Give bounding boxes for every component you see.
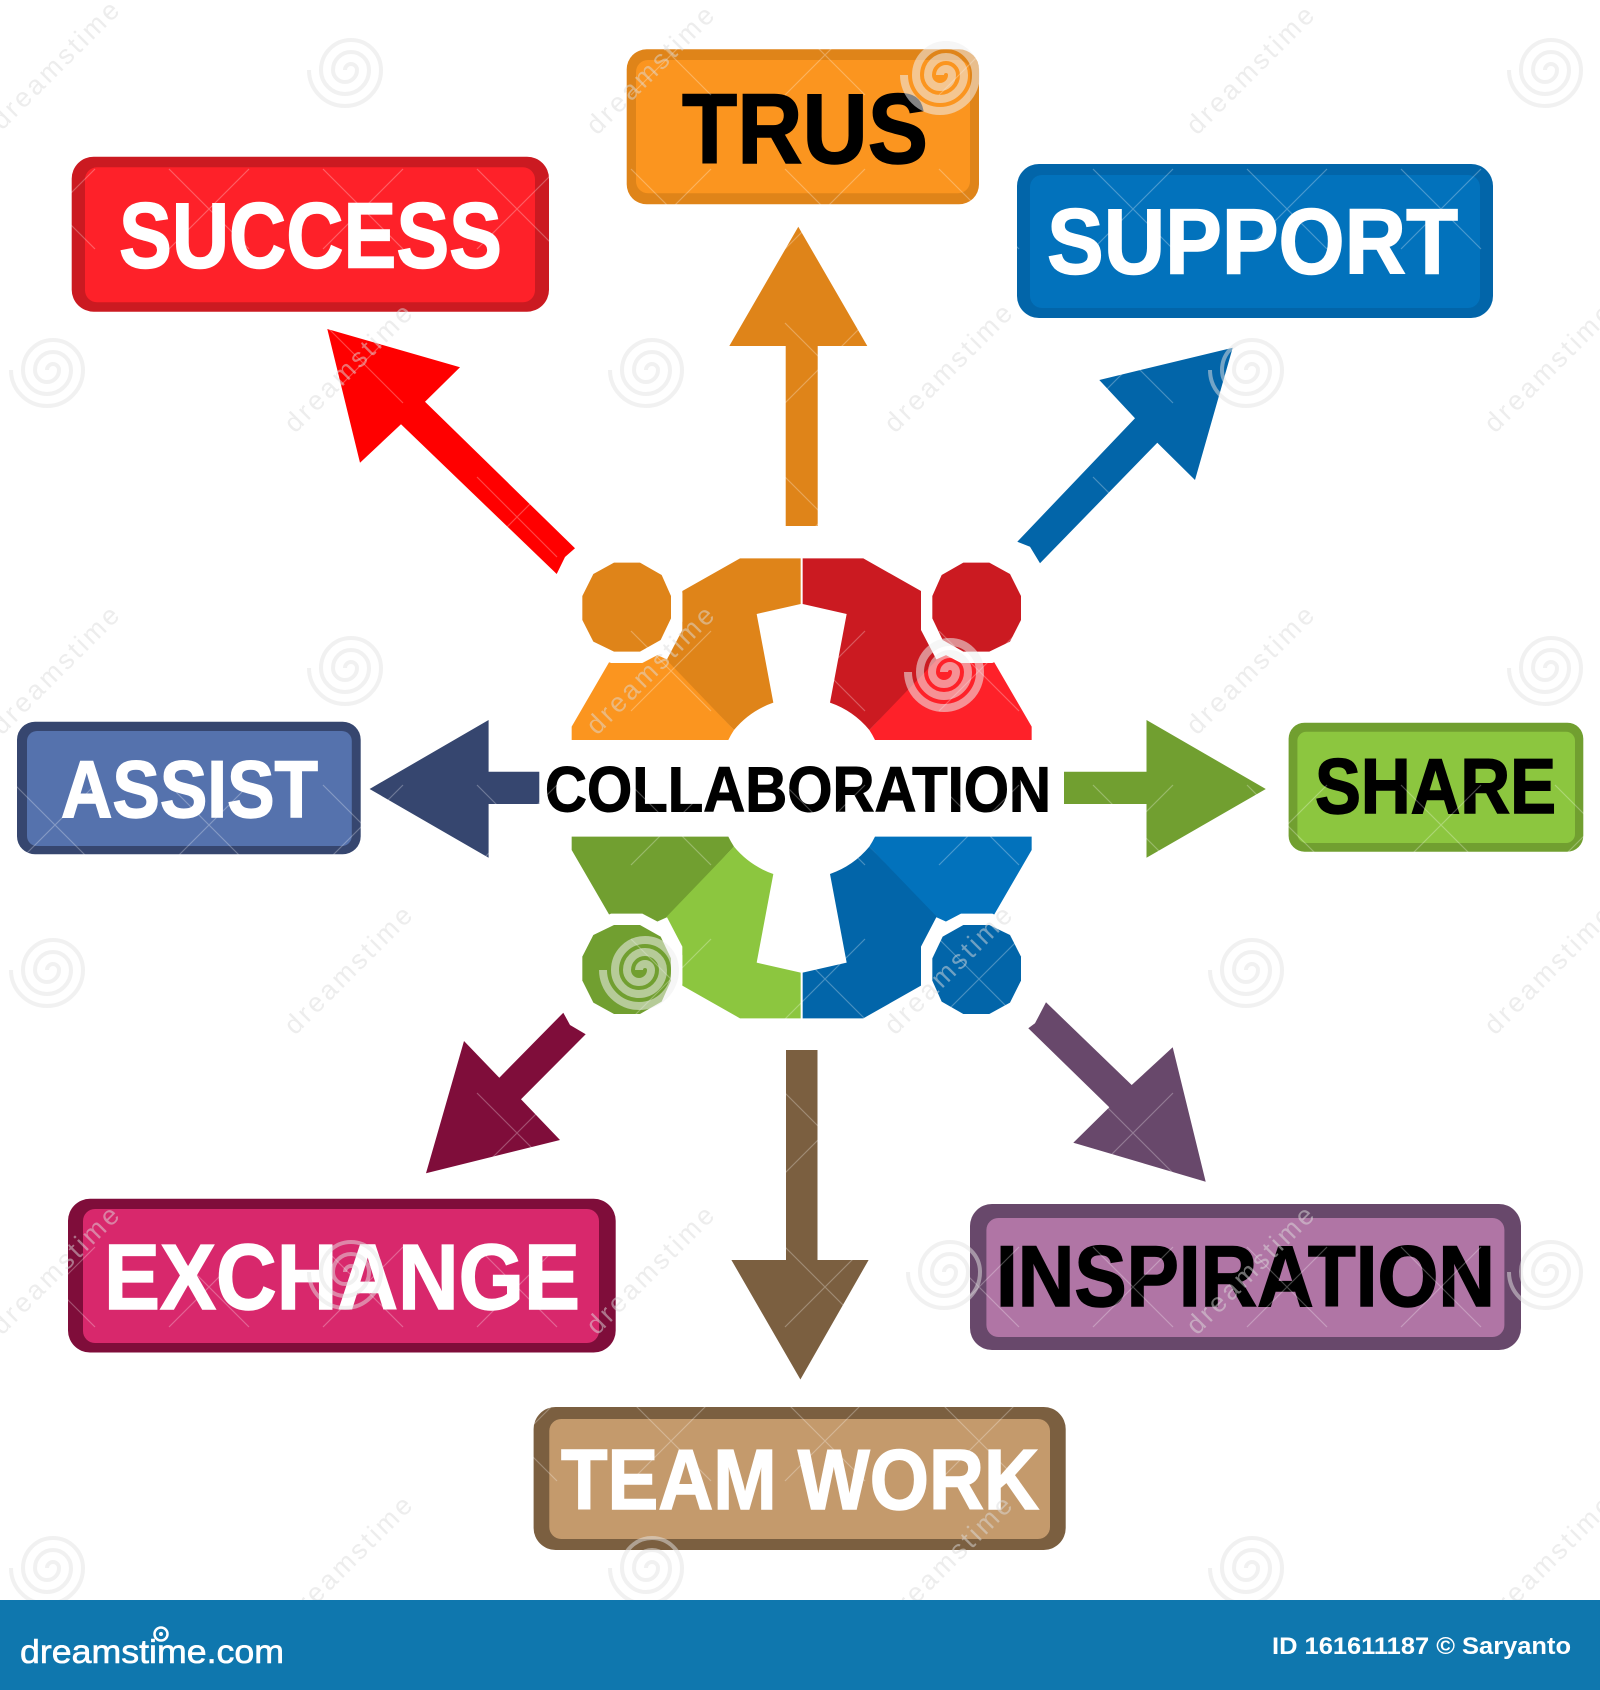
box: success — [72, 157, 549, 312]
footer logo: dreamstime.com — [20, 1633, 284, 1670]
watermark text: dreamstime — [878, 898, 1020, 1040]
watermark text: dreamstime — [580, 0, 722, 140]
watermark text: dreamstime — [278, 1488, 420, 1630]
central people figures — [571, 552, 1032, 1025]
box: inspiration — [970, 1204, 1521, 1350]
box: exchange: EXCHANGE — [104, 1225, 580, 1329]
arrow: to inspiration — [1028, 1002, 1206, 1182]
box: share — [1289, 723, 1583, 852]
person: green — [571, 837, 801, 1025]
arrow: to team work — [731, 1050, 869, 1380]
box: inspiration: INSPIRATION — [996, 1229, 1495, 1325]
watermark text: dreamstime — [1180, 1198, 1322, 1340]
watermark text: dreamstime — [580, 598, 722, 740]
box: team work — [534, 1407, 1066, 1550]
person: red — [803, 552, 1032, 740]
watermark text: dreamstime — [278, 898, 420, 1040]
person: orange — [571, 552, 801, 740]
watermark text: dreamstime — [878, 296, 1020, 438]
footer bar — [0, 1600, 1600, 1690]
box: team work: TEAM WORK — [561, 1433, 1039, 1528]
box: support — [1017, 164, 1493, 318]
box: share: SHARE — [1315, 742, 1556, 830]
watermark text: dreamstime — [580, 1198, 722, 1340]
box: success: SUCCESS — [119, 184, 502, 288]
arrow: to assist — [370, 720, 539, 858]
box: exchange — [68, 1199, 616, 1352]
arrow: to exchange — [426, 1013, 586, 1173]
box: trust: TRUS — [682, 73, 928, 184]
box: trust — [627, 49, 979, 204]
person: blue — [803, 837, 1032, 1025]
box: assist — [17, 722, 361, 854]
watermark text: dreamstime — [1180, 0, 1322, 140]
arrow: to success — [327, 329, 575, 574]
center label: collaboration: COLLABORATION — [545, 754, 1051, 826]
box: assist: ASSIST — [61, 745, 318, 835]
footer credit: ID 161611187 © Saryanto — [1272, 1633, 1571, 1660]
watermark text: dreamstime — [1180, 598, 1322, 740]
box: support: SUPPORT — [1047, 190, 1458, 294]
watermark text: dreamstime — [278, 296, 420, 438]
arrow: to share — [1064, 720, 1266, 858]
arrow: to trust — [729, 227, 867, 526]
arrow: to support — [1017, 348, 1233, 563]
watermark text: dreamstime — [878, 1488, 1020, 1630]
